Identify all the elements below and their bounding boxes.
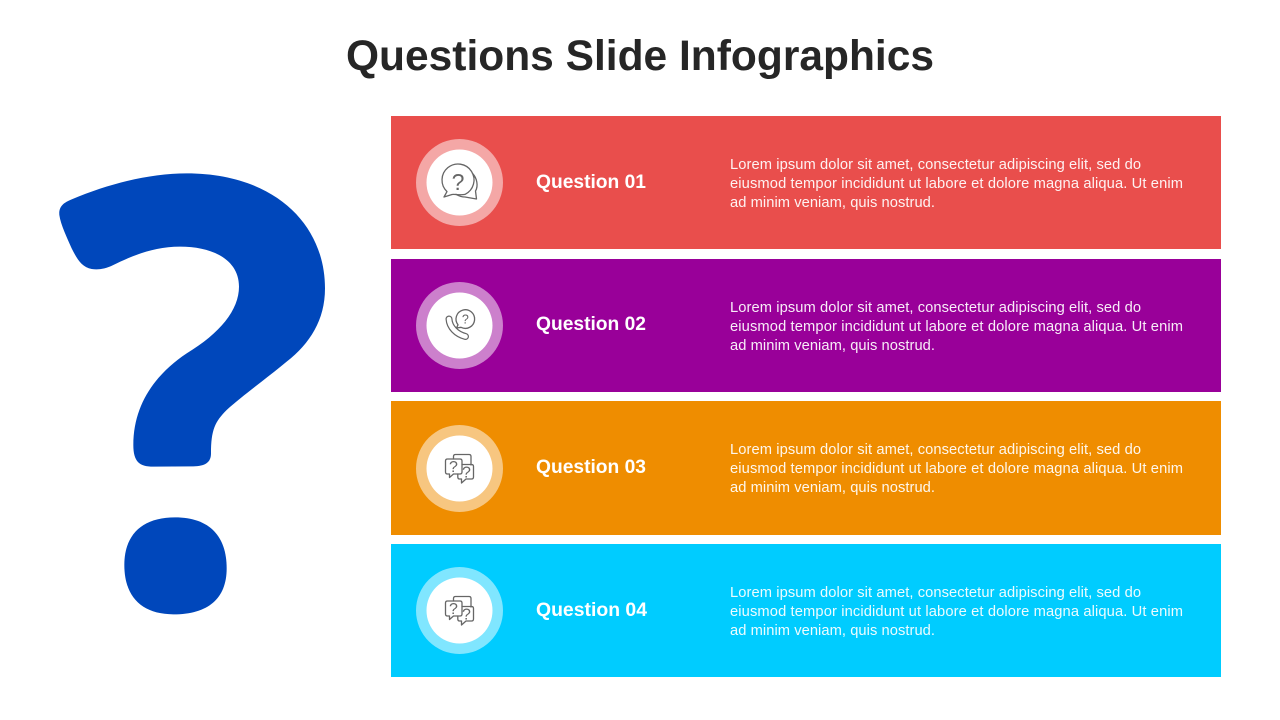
title: Questions Slide Infographics bbox=[346, 32, 934, 80]
text block: question 01 bbox=[730, 157, 1183, 211]
heading: question 01: Question 01 bbox=[536, 172, 646, 193]
text block: question 03: eiusmod tempor incididunt ut labore et dolore magna aliqua. Ut enim bbox=[730, 461, 1183, 477]
text block: question 03 bbox=[730, 442, 1183, 496]
panel: question 04 bbox=[391, 544, 1221, 677]
icon: three question bubbles bbox=[416, 425, 503, 512]
text block: question 03: ad minim veniam, quis nostrud. bbox=[730, 480, 935, 496]
icon: three question bubbles: ? bbox=[462, 606, 471, 624]
text block: question 02: eiusmod tempor incididunt ut labore et dolore magna aliqua. Ut enim bbox=[730, 319, 1183, 335]
panel: question 03 bbox=[391, 401, 1221, 535]
icon: phone with question bubble bbox=[416, 282, 503, 369]
text block: question 02: ad minim veniam, quis nostrud. bbox=[730, 338, 935, 354]
heading: question 02: Question 02 bbox=[536, 314, 646, 335]
text block: question 04: eiusmod tempor incididunt ut labore et dolore magna aliqua. Ut enim bbox=[730, 604, 1183, 620]
text block: question 01: Lorem ipsum dolor sit amet, consectetur adipiscing elit, sed do bbox=[730, 157, 1141, 173]
text block: question 02: Lorem ipsum dolor sit amet, consectetur adipiscing elit, sed do bbox=[730, 300, 1141, 316]
icon: three question bubbles: ? bbox=[462, 464, 471, 482]
panel: question 02 bbox=[391, 259, 1221, 392]
icon: three question bubbles: ? bbox=[449, 601, 458, 618]
text block: question 03: Lorem ipsum dolor sit amet, consectetur adipiscing elit, sed do bbox=[730, 442, 1141, 458]
icon: chat bubbles with question mark bbox=[416, 139, 503, 226]
icon: chat bubbles with question mark: ? bbox=[452, 169, 464, 195]
text block: question 04: ad minim veniam, quis nostrud. bbox=[730, 623, 935, 639]
text block: question 04 bbox=[730, 585, 1183, 639]
text block: question 01: eiusmod tempor incididunt ut labore et dolore magna aliqua. Ut enim bbox=[730, 176, 1183, 192]
text block: question 04: Lorem ipsum dolor sit amet, consectetur adipiscing elit, sed do bbox=[730, 585, 1141, 601]
icon: phone with question bubble: ? bbox=[462, 312, 469, 326]
icon: three question bubbles bbox=[416, 567, 503, 654]
icon: large question mark bbox=[59, 173, 325, 614]
heading: question 03: Question 03 bbox=[536, 457, 646, 478]
icon: three question bubbles: ? bbox=[449, 459, 458, 476]
text block: question 02 bbox=[730, 300, 1183, 354]
panel: question 01 bbox=[391, 116, 1221, 249]
text block: question 01: ad minim veniam, quis nostrud. bbox=[730, 195, 935, 211]
heading: question 04: Question 04 bbox=[536, 600, 647, 621]
